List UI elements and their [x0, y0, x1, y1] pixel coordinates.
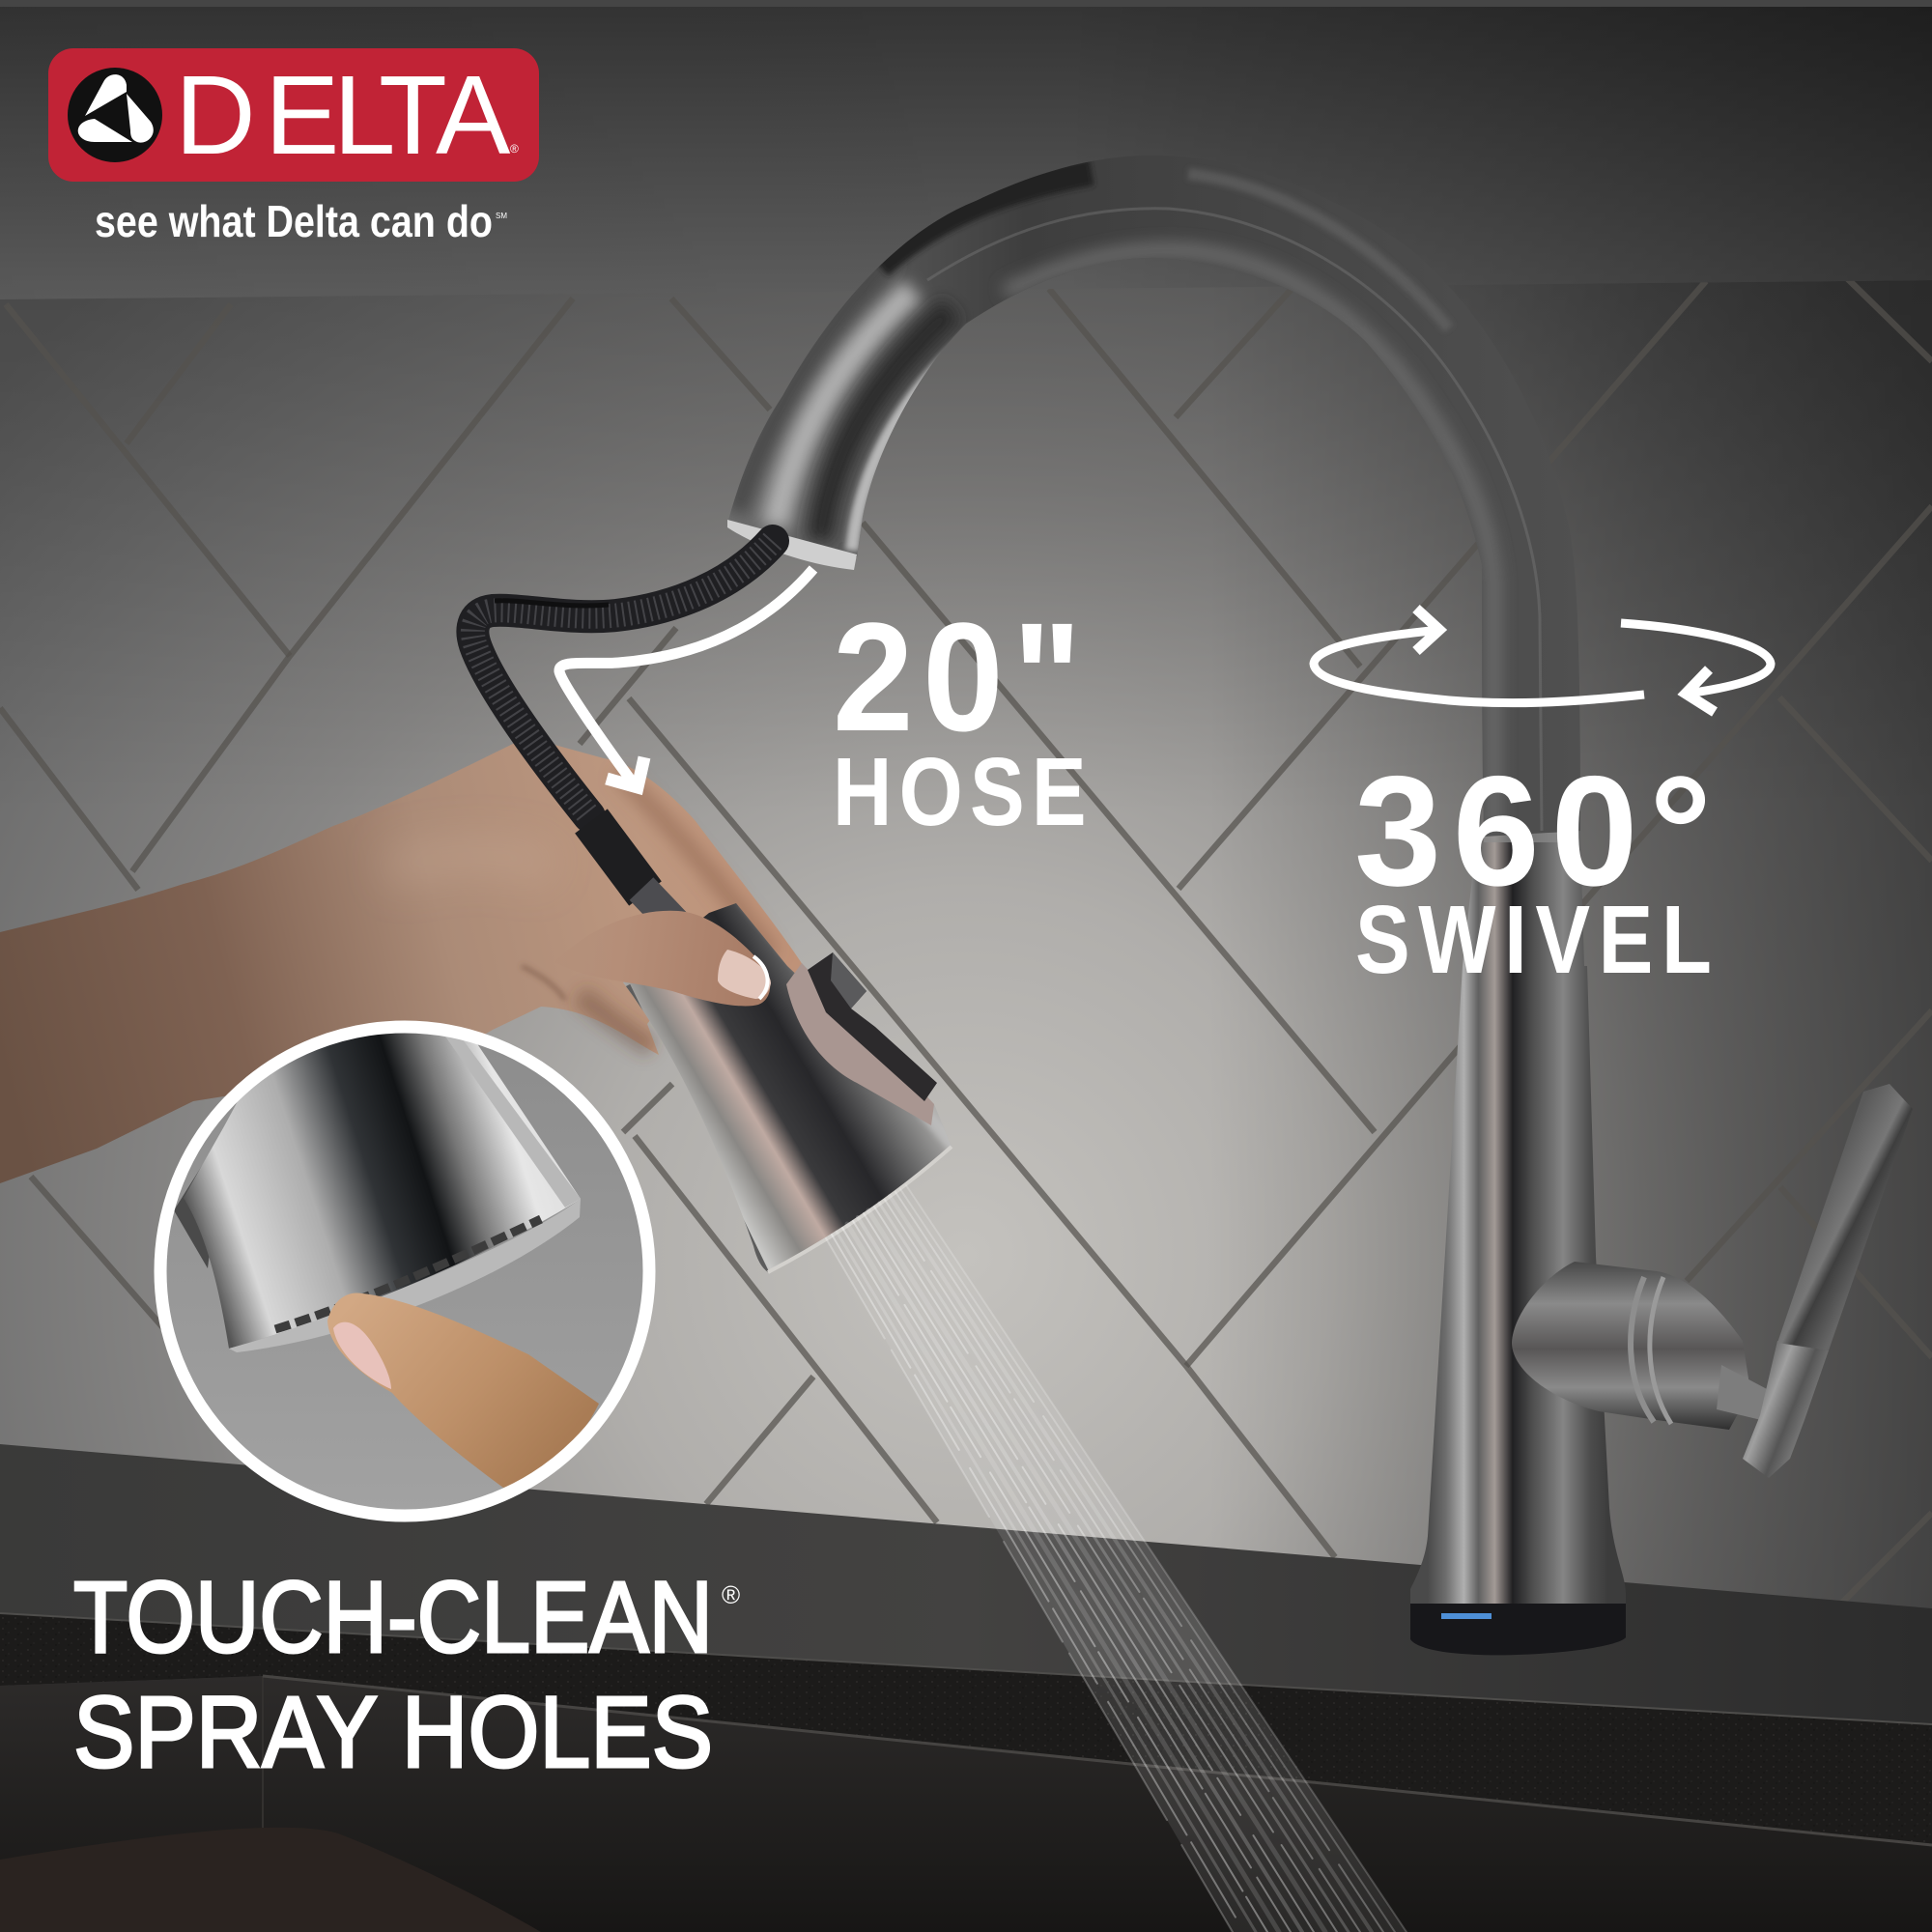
heading: touch-clean spray holes: SPRAY HOLES	[73, 1676, 713, 1789]
handle stem	[1717, 1365, 1777, 1424]
spout nozzle rim	[727, 520, 857, 570]
top soffit band	[0, 0, 1932, 299]
arrow: hose path	[559, 569, 813, 787]
logo: Delta	[48, 48, 539, 182]
spray hose	[472, 541, 773, 816]
fingertip	[327, 1293, 599, 1488]
handle barrel	[1743, 1341, 1829, 1478]
heading: touch-clean spray holes	[73, 1561, 740, 1789]
hand shadow at bottom edge	[0, 1828, 541, 1932]
faucet body	[1410, 773, 1626, 1655]
handle lever	[1777, 1084, 1913, 1350]
tagline: see what Delta can do	[95, 196, 493, 246]
hose connector	[591, 821, 715, 966]
wall: herringbone tile backsplash	[0, 278, 1932, 1613]
inset circle: touch-clean spray holes close-up	[160, 1005, 649, 1516]
button recess	[786, 963, 934, 1125]
callout: 360 degree swivel: SWIVEL	[1355, 885, 1712, 994]
heading: touch-clean spray holes: TOUCH-CLEAN	[73, 1561, 713, 1674]
touch base ring	[1410, 1604, 1626, 1655]
arrow: swivel rotation	[1314, 609, 1771, 712]
countertop	[0, 1444, 1932, 1932]
callout: 20 inch hose	[833, 590, 1087, 846]
thumb	[554, 911, 771, 1006]
water spray	[826, 1185, 1406, 1932]
chrome spray head close-up	[174, 1165, 209, 1268]
callout: 360 degree swivel: 360°	[1354, 744, 1712, 919]
callout: 20 inch hose: HOSE	[833, 737, 1087, 846]
spray face with holes	[229, 1199, 581, 1352]
tagline: SM	[496, 212, 507, 220]
spray head	[623, 898, 956, 1275]
logo: Delta: ®	[510, 142, 519, 156]
hand holding the spray head	[0, 737, 807, 1183]
logo: Delta: DELTA	[175, 52, 511, 178]
callout: 20 inch hose: 20"	[833, 590, 1082, 763]
faucet spout arch	[727, 156, 1580, 837]
icon: Delta tri-drop mark	[68, 68, 162, 162]
faucet handle	[1512, 1084, 1913, 1478]
heading: touch-clean spray holes: ®	[722, 1580, 740, 1609]
blue LED	[1441, 1613, 1492, 1619]
spray button	[808, 952, 937, 1101]
